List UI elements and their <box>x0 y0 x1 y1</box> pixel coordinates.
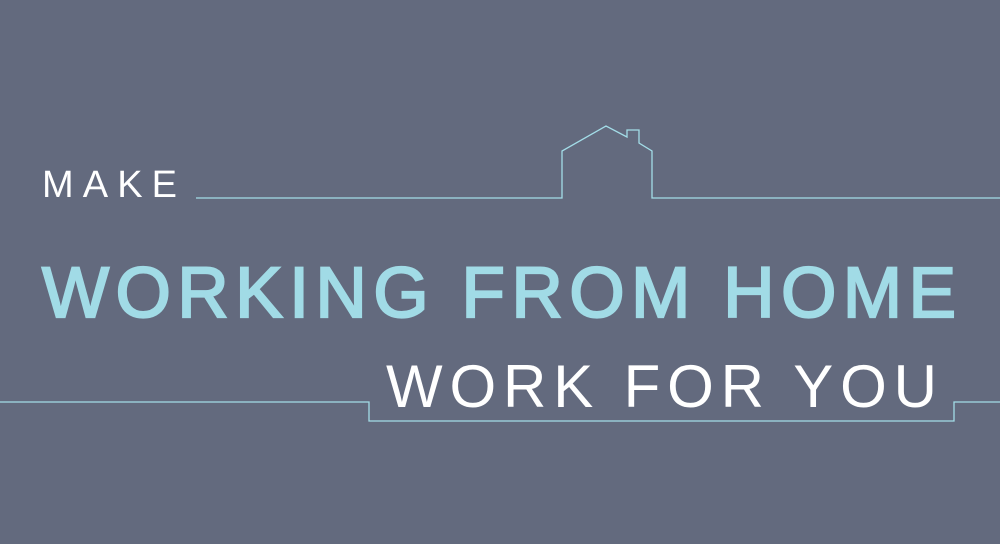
underline bracket line <box>0 402 1000 421</box>
subtitle: WORK FOR YOU: WORK FOR YOU <box>386 353 937 420</box>
text: MAKE: MAKE <box>42 164 177 206</box>
icon: house outline line <box>196 126 1000 198</box>
title: WORKING FROM HOME: WORKING FROM HOME <box>42 254 956 333</box>
